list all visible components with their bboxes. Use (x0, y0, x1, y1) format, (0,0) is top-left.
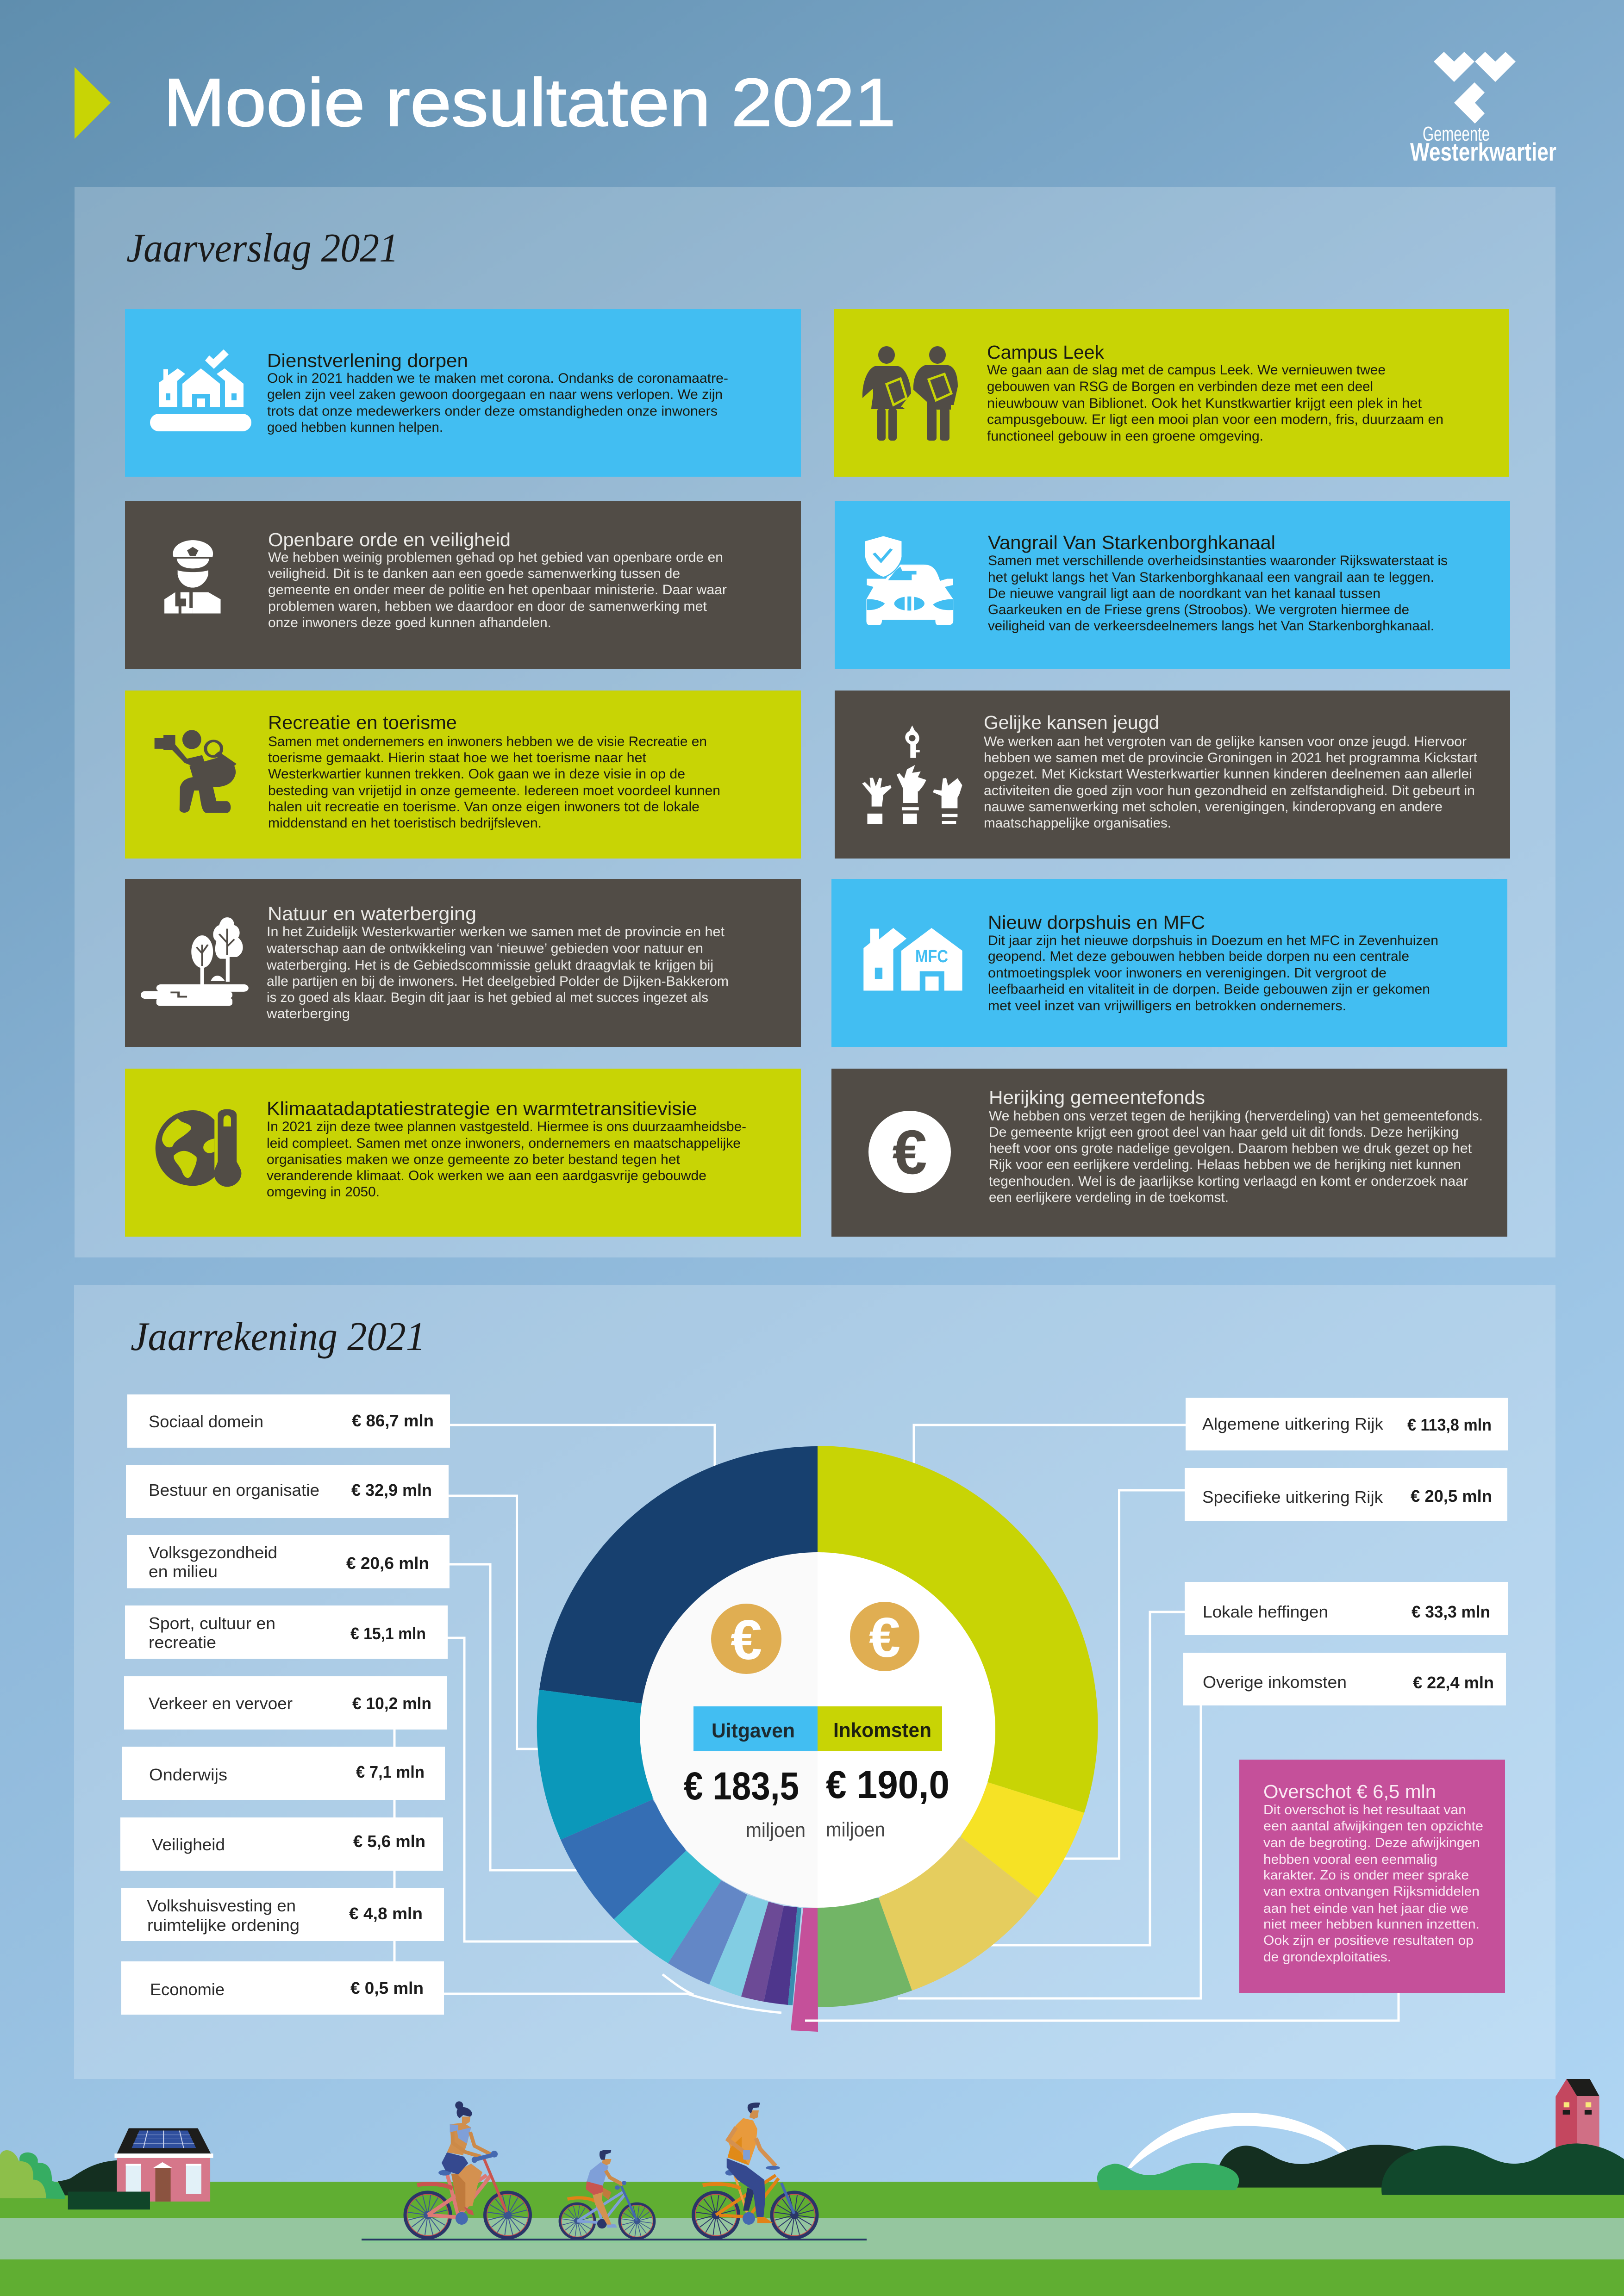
label: Onderwijs (122, 1747, 445, 1800)
body text: tegenhouden. Wel is de jaarlijkse korting verlaagd en komt er onderzoek naar (989, 1174, 1468, 1189)
icon: euro coin Uitgaven (711, 1604, 781, 1674)
icon: euro coin: € (892, 1117, 927, 1187)
body text (989, 1108, 1483, 1205)
body text: waterschap aan de ontwikkeling van ‘nieuwe’ gebieden voor natuur en (266, 941, 703, 956)
body text: goed hebben kunnen helpen. (267, 420, 443, 435)
logo: Gemeente Westerkwartier: Westerkwartier (1410, 137, 1556, 166)
body text: ontmoetingsplek voor inwoners en verenigingen. Dit vergroot de (988, 965, 1387, 981)
body text: Gaarkeuken en de Friese grens (Stroobos). We vergroten hiermee de (988, 602, 1409, 617)
body text: is zo goed als klaar. Begin dit jaar is het gebied al met succes ingezet als (267, 990, 708, 1005)
icon: kneeling photographer with backpack (155, 730, 236, 813)
label: Economie: € 0,5 mln (350, 1979, 424, 1997)
callout text: Dit overschot is het resultaat van (1263, 1803, 1466, 1817)
segment: Sociaal domein (539, 1446, 818, 1704)
label: Veiligheid: € 5,6 mln (353, 1832, 425, 1851)
landscape: grass and road (0, 2182, 1624, 2296)
segment: Bestuur en organisatie (537, 1690, 653, 1840)
body text (987, 362, 1443, 444)
body text: veiligheid van de verkeersdeelnemers langs het Van Starkenborghkanaal. (988, 618, 1434, 634)
body text (266, 924, 729, 1021)
label: Uitgaven: Uitgaven (712, 1719, 795, 1742)
label: Sociaal domein: Sociaal domein (149, 1412, 263, 1431)
icon: euro coin Uitgaven: € (731, 1608, 762, 1671)
heading: Klimaatadaptatiestrategie en warmtetransitievisie (267, 1098, 697, 1119)
body text (268, 550, 727, 630)
card: Vangrail Van Starkenborghkanaal (835, 501, 1510, 669)
label: Algemene uitkering Rijk: € 113,8 mln (1407, 1415, 1492, 1434)
connector: Economie (444, 1974, 781, 2013)
icon: two people with books (862, 346, 958, 441)
body text: leid compleet. Samen met onze inwoners, ondernemers en maatschappelijke (267, 1136, 741, 1151)
icon: euro coin Inkomsten: € (869, 1606, 900, 1669)
body text: omgeving in 2050. (267, 1184, 380, 1200)
heading: Openbare orde en veiligheid (268, 529, 511, 550)
callout text: een aantal afwijkingen ten opzichte (1263, 1819, 1483, 1834)
label: Economie: Economie (150, 1980, 225, 1999)
body text: nieuwbouw van Biblionet. Ook het Kunstkwartier krijgt een plek in het (987, 396, 1422, 411)
heading: Jaarverslag 2021: Jaarverslag 2021 (126, 226, 399, 271)
label: Onderwijs: Onderwijs (149, 1765, 227, 1784)
body text: waterberging (266, 1006, 350, 1021)
heading: Dienstverlening dorpen (267, 350, 468, 371)
donut chart: Uitgaven en Inkomsten (537, 1446, 1098, 2032)
total: Inkomsten (826, 1763, 949, 1841)
body text: We werken aan het vergroten van de gelijke kansen voor onze jeugd. Hiervoor (984, 734, 1467, 749)
body text: campusgebouw. Er ligt een mooi plan voor een modern, fris, duurzaam en (987, 412, 1443, 427)
callout text: niet meer hebben kunnen inzetten. (1263, 1917, 1480, 1932)
body text: gemeente en onder meer de politie en het openbaar ministerie. Daar waar (268, 582, 727, 597)
panel: Jaarverslag 2021 (75, 187, 1555, 1257)
landscape: bridge arc, bushes and tower (1097, 2079, 1624, 2195)
body text: Dit jaar zijn het nieuwe dorpshuis in Doezum en het MFC in Zevenhuizen (988, 933, 1438, 948)
label: Sport, cultuur en recreatie: recreatie (149, 1633, 216, 1652)
centre disc (640, 1552, 995, 1908)
card: Herijking gemeentefonds (831, 1069, 1507, 1237)
body text: problemen waren, hebben we daardoor en door de samenwerking met (268, 599, 707, 614)
heading: Natuur en waterberging (268, 903, 476, 924)
label: Sociaal domein (127, 1394, 450, 1448)
card: Natuur en waterberging (125, 879, 801, 1047)
total: Uitgaven: miljoen (746, 1819, 806, 1842)
rider and frame (417, 2101, 506, 2225)
label: Overige inkomsten (1183, 1653, 1506, 1705)
body text: In 2021 zijn deze twee plannen vastgesteld. Hiermee is ons duurzaamheidsbe- (267, 1119, 746, 1134)
body text: middenstand en het toeristisch bedrijfsleven. (268, 815, 542, 831)
card: Gelijke kansen jeugd (835, 691, 1510, 859)
segment: Economie (788, 1907, 801, 2005)
body text (988, 553, 1448, 634)
tree behind house (58, 2160, 117, 2196)
body text: trots dat onze medewerkers onder deze omstandigheden onze inwoners (267, 404, 718, 419)
card: Campus Leek (834, 309, 1509, 477)
segment: Overschot (pink wedge) (791, 1908, 818, 2032)
segment: Overige inkomsten (818, 1898, 912, 2007)
segment: Volksgezondheid en milieu (561, 1799, 686, 1919)
label: Specifieke uitkering Rijk (1185, 1468, 1507, 1521)
label: Lokale heffingen: € 33,3 mln (1412, 1602, 1490, 1621)
body text: besteding van vrijetijd in onze gemeente. Iedereen moet voordeel kunnen (268, 783, 720, 798)
body text: hebben we samen met de provincie Groningen in 2021 het programma Kickstart (984, 750, 1478, 765)
label: Inkomsten (818, 1706, 942, 1751)
body text: De nieuwe vangrail ligt aan de noordkant van het kanaal tussen (988, 586, 1380, 601)
body text: leefbaarheid en vitaliteit in de dorpen. Beide gebouwen zijn er gekomen (988, 982, 1430, 997)
label: Lokale heffingen (1185, 1582, 1508, 1635)
icon: key and three raised hands (862, 725, 962, 824)
segment: Algemene uitkering Rijk (818, 1446, 1098, 1813)
body text: opgezet. Met Kickstart Westerkwartier kunnen kinderen deelnemen aan allerlei (984, 766, 1472, 782)
card: Nieuw dorpshuis en MFC (831, 879, 1507, 1047)
icon: village with check mark (150, 349, 251, 431)
callout text: de grondexploitaties. (1263, 1950, 1391, 1965)
icon: car with shield (864, 535, 953, 625)
label: Volkshuisvesting en ruimtelijke ordening: € 4,8 mln (349, 1904, 423, 1923)
body text: De gemeente krijgt een groot deel van haar geld uit dit fonds. Deze herijking (989, 1125, 1459, 1140)
heading: Nieuw dorpshuis en MFC (988, 912, 1205, 933)
label: Overige inkomsten: € 22,4 mln (1413, 1673, 1494, 1692)
label: Volkshuisvesting en ruimtelijke ordening: Volkshuisvesting en (147, 1896, 296, 1915)
body text: heeft voor ons grote nadelige gevolgen. Daarom hebben we druk gezet op het (989, 1141, 1472, 1156)
segment: Lokale heffingen (879, 1837, 1038, 1991)
body text (988, 933, 1438, 1014)
house (114, 2128, 213, 2202)
label: Veiligheid (120, 1817, 443, 1871)
label: Algemene uitkering Rijk (1186, 1398, 1508, 1450)
body text: maatschappelijke organisaties. (984, 815, 1171, 831)
label: Overige inkomsten: Overige inkomsten (1203, 1673, 1347, 1692)
callout text: van de begroting. Deze afwijkingen (1263, 1836, 1480, 1850)
connector lines behind the chart (394, 1425, 1201, 1998)
label: Onderwijs: € 7,1 mln (356, 1762, 425, 1781)
bicycle: man (693, 2103, 818, 2238)
bush: green (1097, 2163, 1239, 2190)
heading: Vangrail Van Starkenborghkanaal (988, 532, 1275, 553)
body text: toerisme gemaakt. Hierin staat hoe we het toerisme naar het (268, 750, 647, 765)
heading: Jaarrekening 2021: Jaarrekening 2021 (131, 1314, 425, 1359)
body text: activiteiten die goed zijn voor hun gezondheid en zelfstandigheid. Dit gebeurt in (984, 783, 1475, 798)
card: Openbare orde en veiligheid (125, 501, 801, 669)
wheels (405, 2192, 531, 2238)
heading: Gelijke kansen jeugd (984, 712, 1159, 733)
heading: Herijking gemeentefonds (989, 1087, 1205, 1108)
label: Sport, cultuur en recreatie (125, 1605, 448, 1659)
label: Volksgezondheid en milieu (127, 1535, 450, 1588)
body text (984, 734, 1478, 831)
label: Volkshuisvesting en ruimtelijke ordening (121, 1888, 444, 1941)
label: Inkomsten: Inkomsten (833, 1719, 931, 1742)
hedge (68, 2192, 150, 2209)
total: Inkomsten: € 190,0 (826, 1763, 949, 1806)
wheels (560, 2203, 655, 2239)
callout text: van extra ontvangen Rijksmiddelen (1263, 1884, 1480, 1899)
label: Volkshuisvesting en ruimtelijke ordening: ruimtelijke ordening (147, 1916, 300, 1935)
logo: Gemeente Westerkwartier: Gemeente (1423, 123, 1490, 145)
total: Inkomsten: miljoen (826, 1818, 885, 1841)
label: Specifieke uitkering Rijk: Specifieke uitkering Rijk (1202, 1487, 1383, 1506)
rider and frame (703, 2103, 794, 2225)
total: Uitgaven (684, 1764, 806, 1842)
segment: Verkeer en vervoer (668, 1880, 747, 1985)
label: Specifieke uitkering Rijk: € 20,5 mln (1411, 1487, 1492, 1506)
panel: Jaarrekening 2021 (74, 1285, 1555, 2079)
callout text: Ook zijn er positieve resultaten op (1263, 1933, 1474, 1948)
body text: veranderende klimaat. Ook werken we aan een aardgasvrije gebouwde (267, 1168, 706, 1183)
tower (1555, 2079, 1599, 2152)
label: Bestuur en organisatie: Bestuur en organisatie (149, 1481, 319, 1500)
body text (267, 1119, 746, 1200)
body text (268, 734, 720, 831)
segment: Sport, cultuur en recreatie (614, 1851, 721, 1963)
body text: In het Zuidelijk Westerkwartier werken we samen met de provincie en het (267, 924, 725, 940)
icon: euro coin (868, 1111, 951, 1193)
segment: Volkshuisvesting en ruimtelijke ordening (764, 1906, 797, 2005)
body text: het gelukt langs het Van Starkenborghkanaal een vangrail aan te leggen. (988, 570, 1434, 585)
wheels (693, 2192, 818, 2238)
label: Lokale heffingen: Lokale heffingen (1203, 1602, 1328, 1621)
segment: Veiligheid (741, 1902, 784, 2002)
logo: Gemeente Westerkwartier (1410, 52, 1556, 166)
header arrow (75, 67, 111, 139)
label: Verkeer en vervoer: Verkeer en vervoer (149, 1694, 293, 1713)
callout: Overschot (1239, 1760, 1505, 1993)
segment: Onderwijs (709, 1895, 768, 1997)
label: Volksgezondheid en milieu: € 20,6 mln (346, 1554, 429, 1573)
body text: organisaties maken we onze gemeente zo beter bestand tegen het (267, 1152, 681, 1167)
rider and frame (568, 2150, 637, 2228)
title: Mooie resultaten 2021 (163, 65, 896, 141)
body text: Samen met ondernemers en inwoners hebben we de visie Recreatie en (268, 734, 707, 749)
bicycle: woman (405, 2101, 531, 2238)
heading: Recreatie en toerisme (268, 712, 457, 733)
bush: dark green (1381, 2143, 1624, 2195)
callout heading: Overschot € 6,5 mln (1263, 1781, 1436, 1802)
body text (267, 371, 728, 435)
label: Verkeer en vervoer: € 10,2 mln (352, 1694, 431, 1713)
connector: Overschot (805, 1993, 1399, 2021)
bicycle: child (560, 2150, 655, 2239)
body text: met veel inzet van vrijwilligers en betrokken ondernemers. (988, 998, 1346, 1014)
label: Uitgaven (693, 1706, 818, 1751)
body text: Ook in 2021 hadden we te maken met corona. Ondanks de coronamaatre- (267, 371, 728, 386)
body text: We hebben weinig problemen gehad op het gebied van openbare orde en (268, 550, 723, 565)
segment: Specifieke uitkering Rijk (961, 1782, 1084, 1898)
card: Recreatie en toerisme (125, 691, 801, 859)
bridge arc (1127, 2113, 1347, 2168)
label: Bestuur en organisatie (126, 1465, 449, 1518)
callout text: hebben vooral een eenmalig (1263, 1852, 1437, 1867)
icon: trees and water (141, 917, 249, 1006)
landscape: house with solar panels and bushes (0, 2128, 213, 2209)
callout text: karakter. Zo is onder meer sprake (1263, 1868, 1469, 1883)
body text: nauwe samenwerking met scholen, verenigingen, kinderopvang en andere (984, 799, 1443, 815)
body text: gelen zijn veel zaken gewoon doorgegaan en naar wens verlopen. We zijn (267, 387, 723, 402)
body text: gebouwen van RSG de Borgen en verbinden deze met een deel (987, 379, 1373, 394)
label: Sociaal domein: € 86,7 mln (352, 1411, 434, 1430)
icon: village hall and MFC building (863, 928, 962, 991)
total: Uitgaven: € 183,5 (684, 1764, 799, 1808)
label: Bestuur en organisatie: € 32,9 mln (351, 1481, 432, 1500)
heading: Campus Leek (987, 342, 1104, 363)
icon label: MFC: MFC (915, 947, 948, 966)
body text: We hebben ons verzet tegen de herijking (herverdeling) van het gemeentefonds. (989, 1108, 1483, 1124)
label: Economie (121, 1961, 444, 2015)
label: Volksgezondheid en milieu: Volksgezondheid (149, 1543, 277, 1562)
body text: veiligheid. Dit is te danken aan een goede samenwerking tussen de (268, 566, 680, 581)
body text: alle partijen en bij de inwoners. Het deelgebied Polder de Dijken-Bakkerom (267, 974, 729, 989)
card: Dienstverlening dorpen (125, 309, 801, 477)
label: Sport, cultuur en recreatie: € 15,1 mln (350, 1624, 426, 1643)
icon: globe and thermometer (156, 1109, 241, 1187)
body text: We gaan aan de slag met de campus Leek. We vernieuwen twee (987, 362, 1386, 378)
body text: halen uit recreatie en toerisme. Van onze eigen inwoners tot de lokale (268, 799, 700, 815)
body text: een eerlijkere verdeling in de toekomst. (989, 1190, 1229, 1205)
label: Volksgezondheid en milieu: en milieu (149, 1562, 218, 1581)
body text: onze inwoners deze goed kunnen afhandelen. (268, 615, 551, 630)
body text: Rijk voor een eerlijkere verdeling. Helaas hebben we de herijking niet kunnen (989, 1157, 1461, 1172)
body text: Samen met verschillende overheidsinstanties waaronder Rijkswaterstaat is (988, 553, 1448, 568)
callout text: aan het einde van het jaar die we (1263, 1901, 1468, 1916)
callout text (1263, 1803, 1483, 1965)
label: Algemene uitkering Rijk: Algemene uitkering Rijk (1202, 1414, 1384, 1433)
card: Klimaatadaptatiestrategie en warmtetransitievisie (125, 1069, 801, 1237)
body text: functioneel gebouw in een groene omgeving. (987, 429, 1263, 444)
body text: waterberging. Het is de Gebiedscommissie gelukt draagvlak te krijgen bij (266, 958, 713, 973)
label: Sport, cultuur en recreatie: Sport, cultuur en (149, 1614, 275, 1633)
label: Verkeer en vervoer (124, 1676, 447, 1730)
label: Veiligheid: Veiligheid (152, 1835, 225, 1854)
body text: geopend. Met deze gebouwen hebben beide dorpen nu een centrale (988, 949, 1409, 964)
bush: dark (1216, 2145, 1430, 2188)
body text: Westerkwartier kunnen trekken. Ook gaan we in deze visie in op de (268, 766, 685, 782)
bushes (19, 2153, 65, 2199)
icon: police officer (164, 540, 221, 614)
icon: euro coin Inkomsten (850, 1602, 919, 1671)
